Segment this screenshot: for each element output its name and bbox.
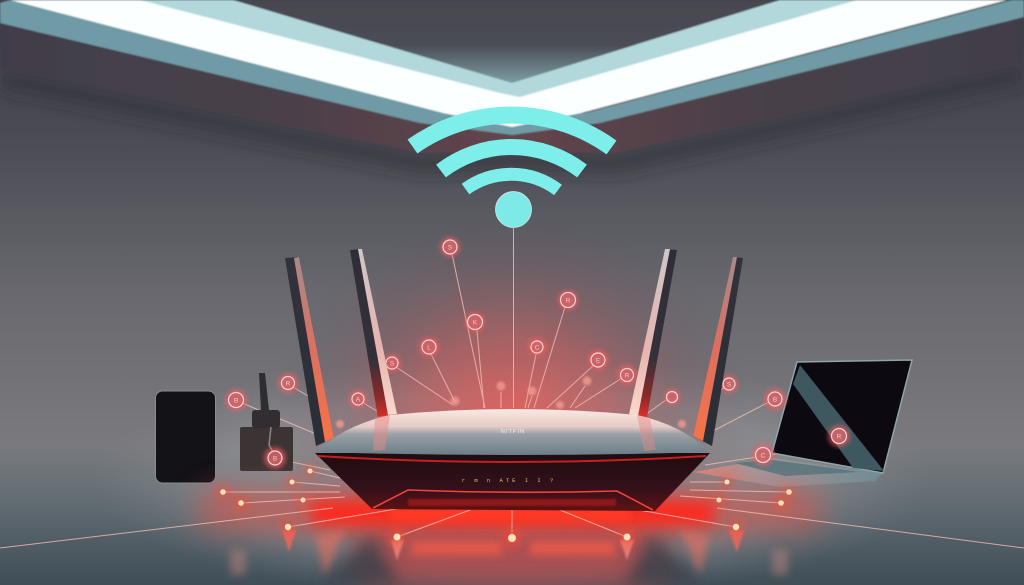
wifi arc: inner: [466, 174, 558, 190]
wifi arc: outer: [412, 115, 612, 148]
icon nodes: B: [773, 396, 777, 404]
icon nodes: C: [535, 344, 540, 352]
icon nodes: E: [596, 358, 601, 364]
wifi arc: middle: [441, 147, 582, 171]
antenna: inner right: [629, 249, 677, 417]
lower light bar: [373, 490, 653, 510]
icon nodes: L: [427, 344, 431, 352]
icon nodes: C: [761, 452, 766, 460]
wifi symbol: [412, 115, 612, 228]
ceiling with light strips: [0, 0, 1024, 175]
laptop: [693, 360, 912, 487]
bottle object: [240, 373, 293, 471]
laptop screen: [772, 360, 912, 473]
floor glow and reflection: [200, 490, 820, 585]
floor signal lines: [0, 471, 1024, 548]
antenna: far left: [285, 257, 334, 446]
icon nodes: B: [234, 398, 238, 404]
laptop base: [693, 458, 883, 487]
antenna: inner left: [350, 249, 397, 418]
icon nodes: R: [837, 434, 842, 440]
router: [285, 249, 743, 511]
icon nodes: R: [625, 372, 630, 380]
icon nodes: S: [448, 244, 453, 252]
icon nodes: K: [473, 320, 478, 326]
icon nodes: A: [356, 396, 361, 404]
wifi dot: [496, 192, 532, 228]
antenna: far right: [693, 257, 743, 446]
phone: [156, 391, 216, 483]
router brand label: NITFIN: [501, 429, 525, 435]
status LEDs: r m n ATE I I ?: [462, 477, 556, 484]
icon nodes: B: [273, 456, 277, 462]
icon nodes: S: [727, 382, 732, 388]
small signal dots: [336, 376, 686, 428]
router base: [315, 453, 710, 511]
red light line: [318, 456, 706, 462]
icon nodes: R: [286, 380, 291, 388]
icon nodes: S: [390, 360, 395, 368]
signal lines from router: [242, 228, 832, 470]
floor signal nodes: [217, 466, 794, 546]
icon nodes: [225, 237, 850, 469]
router top shell: [315, 409, 710, 455]
icon nodes: R: [566, 298, 571, 304]
